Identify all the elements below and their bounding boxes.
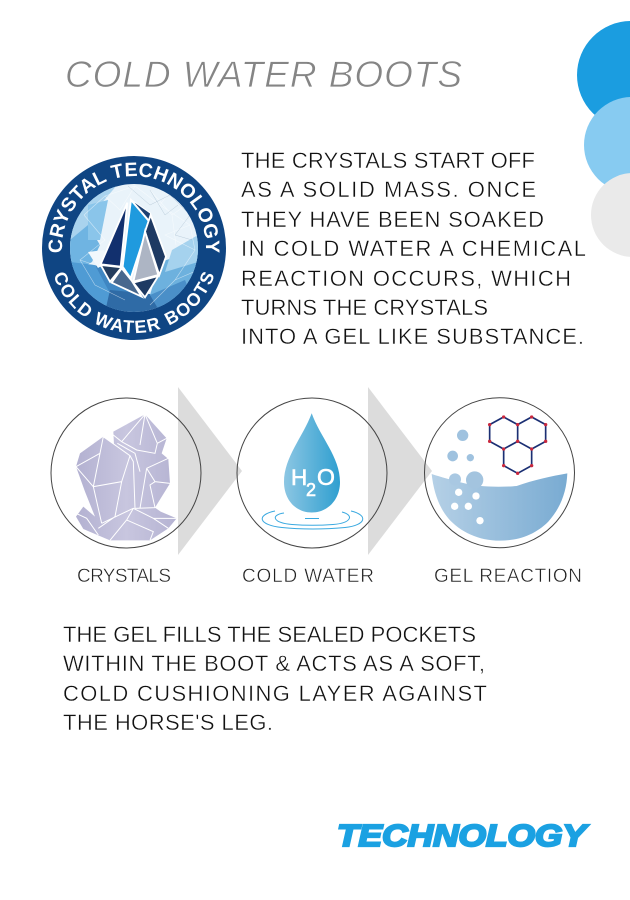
icon: water drop <box>284 413 340 512</box>
text block: crystal explanation: AS A SOLID MASS. ONCE <box>241 177 536 202</box>
icon: crystal technology badge: COLD WATER BOOTS <box>55 272 214 334</box>
gel liquid <box>432 473 567 541</box>
text block: gel explanation <box>63 622 487 735</box>
arrow: water to gel <box>368 387 432 555</box>
molecule hexagons <box>490 417 546 473</box>
text block: gel explanation: THE GEL FILLS THE SEALED POCKETS <box>63 622 476 647</box>
text block: crystal explanation: TURNS THE CRYSTALS <box>241 295 488 320</box>
ripples <box>262 511 363 529</box>
text block: crystal explanation <box>241 148 586 349</box>
H2O label: 2 <box>306 480 316 500</box>
H2O label: O <box>317 464 335 490</box>
label: cold water: COLD WATER <box>242 566 374 587</box>
panel: cold water <box>237 398 387 548</box>
text block: crystal explanation: INTO A GEL LIKE SUBSTANCE. <box>241 324 584 349</box>
H2O label: H <box>291 465 307 490</box>
H2O label <box>291 464 335 500</box>
badge text: CRYSTAL TECHNOLOGY <box>48 162 220 253</box>
panel: gel reaction <box>424 398 574 548</box>
label: crystals: CRYSTALS <box>77 566 171 587</box>
arrow: crystals to water <box>178 387 242 555</box>
text block: gel explanation: WITHIN THE BOOT & ACTS AS A SOFT, <box>63 651 485 676</box>
text block: crystal explanation: THE CRYSTALS START OFF <box>241 148 535 173</box>
bubbles <box>451 489 484 524</box>
title: COLD WATER BOOTS <box>65 54 462 95</box>
text block: gel explanation: COLD CUSHIONING LAYER AGAINST <box>63 681 487 706</box>
crystal gem <box>101 200 166 297</box>
text block: crystal explanation: REACTION OCCURS, WHICH <box>241 266 571 291</box>
decorative circles: top right <box>577 21 630 257</box>
label: gel reaction: GEL REACTION <box>434 566 582 587</box>
text block: crystal explanation: IN COLD WATER A CHEMICAL <box>241 236 586 261</box>
footer heading: technology: TECHNOLOGY <box>337 818 590 853</box>
text block: crystal explanation: THEY HAVE BEEN SOAKED <box>241 207 544 232</box>
icon: crystal technology badge <box>42 156 226 340</box>
panel: crystals <box>51 398 201 548</box>
text block: gel explanation: THE HORSE'S LEG. <box>63 710 273 735</box>
